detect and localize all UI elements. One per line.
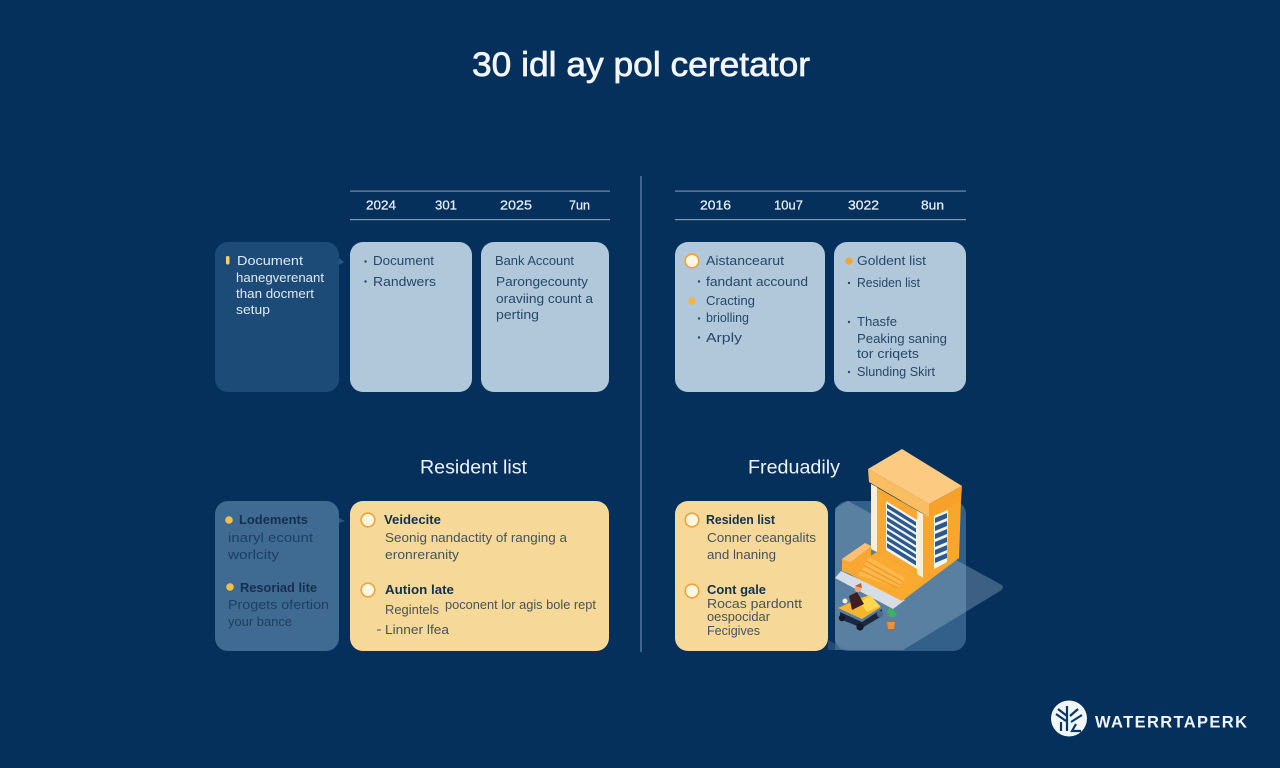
panel: document list: Randwers xyxy=(373,275,436,289)
panel: resident list card: Residen list xyxy=(706,513,776,527)
panel: veidecite: eronreranity xyxy=(385,548,460,562)
panel: assistance account: Arply xyxy=(706,331,743,345)
panel: document management: Document xyxy=(237,254,304,268)
left timeline header: 2024 xyxy=(366,198,396,212)
logo wordmark: WATERRTAPERK xyxy=(1095,714,1247,732)
panel: bank account xyxy=(481,242,609,392)
panel: lodements: worlcity xyxy=(227,548,280,562)
roof xyxy=(868,449,962,504)
title: 30 idl ay pol ceretator xyxy=(472,46,810,84)
panel: veidecite: Veidecite xyxy=(384,513,441,527)
left timeline header: 7un xyxy=(569,198,590,212)
left timeline header: 2025 xyxy=(500,198,532,212)
panel: assistance account xyxy=(675,242,825,392)
panel: bank account: oraviing count a xyxy=(496,292,593,306)
stair block and lower front xyxy=(855,552,923,601)
panel: golden list: Peaking saning xyxy=(857,332,947,346)
side louver xyxy=(934,510,948,569)
panel: bank account: perting xyxy=(496,308,539,322)
panel: document list: Document xyxy=(373,254,435,268)
icon: isometric building xyxy=(835,449,962,609)
icon: potted plant xyxy=(887,608,897,629)
panel: lodements: Lodements xyxy=(239,513,308,527)
panel: resident list card: Fecigives xyxy=(707,624,760,638)
panel: document management: setup xyxy=(236,303,270,317)
panel: document management: than docmert xyxy=(236,287,315,301)
left timeline header: 301 xyxy=(435,198,457,212)
heading: resident list: Resident list xyxy=(420,458,528,478)
logo mark xyxy=(1051,700,1087,736)
panel: lodements: your bance xyxy=(228,615,292,629)
right timeline header: 10u7 xyxy=(774,198,803,212)
panel: golden list: Goldent list xyxy=(857,254,927,268)
panel: lodements: inaryl ecount xyxy=(228,531,314,545)
front wall xyxy=(871,484,923,578)
panel: veidecite: Linner lfea xyxy=(385,623,449,637)
panel: bank account: Bank Account xyxy=(495,254,575,268)
panel: veidecite: Seonig nandactity of ranging a xyxy=(385,531,567,545)
panel: assistance account: fandant accound xyxy=(706,275,808,289)
panel: veidecite: Aution late xyxy=(385,583,454,597)
panel: resident list card: Cont gale xyxy=(707,583,766,597)
grey slab xyxy=(835,571,905,609)
logo xyxy=(1051,700,1247,736)
panel: document management xyxy=(215,242,344,392)
panel: lodements xyxy=(215,501,345,651)
panel: resident list card: Conner ceangalits xyxy=(707,531,816,545)
panel: golden list: Slunding Skirt xyxy=(857,365,936,379)
panel: resident list card: and lnaning xyxy=(707,548,776,562)
panel: lodements: Resoriad lite xyxy=(240,581,317,595)
panel: veidecite: poconent lor agis bole rept xyxy=(445,598,597,612)
panel: veidecite: Regintels xyxy=(385,603,439,617)
panel: golden list: tor criqets xyxy=(857,347,919,361)
center divider xyxy=(640,176,642,652)
panel: golden list: Residen list xyxy=(857,276,921,290)
right timeline header: 2016 xyxy=(700,198,731,212)
panel: lodements: Progets ofertion xyxy=(228,598,329,612)
right timeline header xyxy=(675,190,966,220)
panel: resident list card xyxy=(675,501,828,651)
panel: translucent illustration backdrop xyxy=(828,501,1003,651)
panel: resident list card: Rocas pardontt xyxy=(707,597,803,611)
right wall xyxy=(902,500,961,601)
heading: freduadily: Freduadily xyxy=(748,458,841,478)
panel: document management: hanegverenant xyxy=(236,271,325,285)
panel: document list xyxy=(350,242,472,392)
panel: resident list card: oespocidar xyxy=(707,610,770,624)
left timeline header xyxy=(350,190,610,220)
panel: golden list xyxy=(834,242,966,392)
panel: assistance account: Cracting xyxy=(706,294,755,308)
steps xyxy=(858,557,905,588)
right timeline header: 3022 xyxy=(848,198,879,212)
front louver xyxy=(886,501,917,569)
panel: veidecite xyxy=(350,501,609,651)
white strips xyxy=(871,484,877,552)
panel: assistance account: briolling xyxy=(706,311,749,325)
panel: bank account: Parongecounty xyxy=(496,275,589,289)
panel: golden list: Thasfe xyxy=(857,315,897,329)
panel: assistance account: Aistancearut xyxy=(706,254,785,268)
icon: cart with rider xyxy=(838,583,883,631)
right timeline header: 8un xyxy=(921,198,944,212)
